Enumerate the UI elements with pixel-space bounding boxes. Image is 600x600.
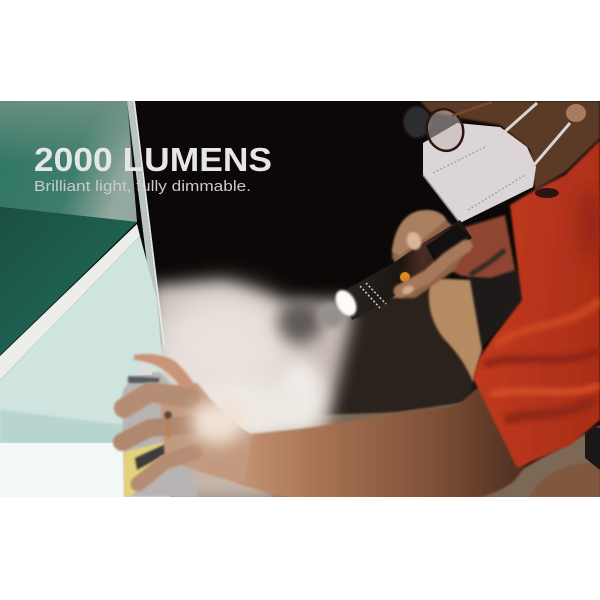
flashlight logo <box>400 272 410 282</box>
arm <box>225 380 530 500</box>
fingers <box>124 392 190 408</box>
wrist highlight <box>190 400 246 444</box>
left panel: teal wall <box>0 101 170 497</box>
night background <box>0 101 600 497</box>
photo: person lighting spray mist with flashlight <box>0 101 600 500</box>
spray can <box>122 360 198 497</box>
shorts <box>465 270 522 350</box>
spray hand <box>122 354 252 484</box>
infographic canvas <box>0 101 600 497</box>
palm behind flashlight <box>392 210 470 298</box>
rocky ground <box>327 288 476 415</box>
knee <box>429 278 482 382</box>
face and neck <box>420 101 600 190</box>
title: 2000 LUMENS <box>34 141 272 178</box>
mask <box>423 103 570 223</box>
flashlight <box>331 220 472 320</box>
subtitle: Brilliant light, fully dimmable. <box>34 178 251 195</box>
glasses <box>403 102 492 155</box>
mist cloud <box>150 282 352 445</box>
far thigh <box>530 462 600 497</box>
flashlight lens <box>334 288 358 318</box>
thumb <box>134 354 196 390</box>
holding hand fingers <box>392 210 466 296</box>
red shirt <box>473 140 600 468</box>
palm <box>160 383 252 482</box>
tattooed forearm <box>445 215 515 278</box>
floor <box>160 400 600 500</box>
